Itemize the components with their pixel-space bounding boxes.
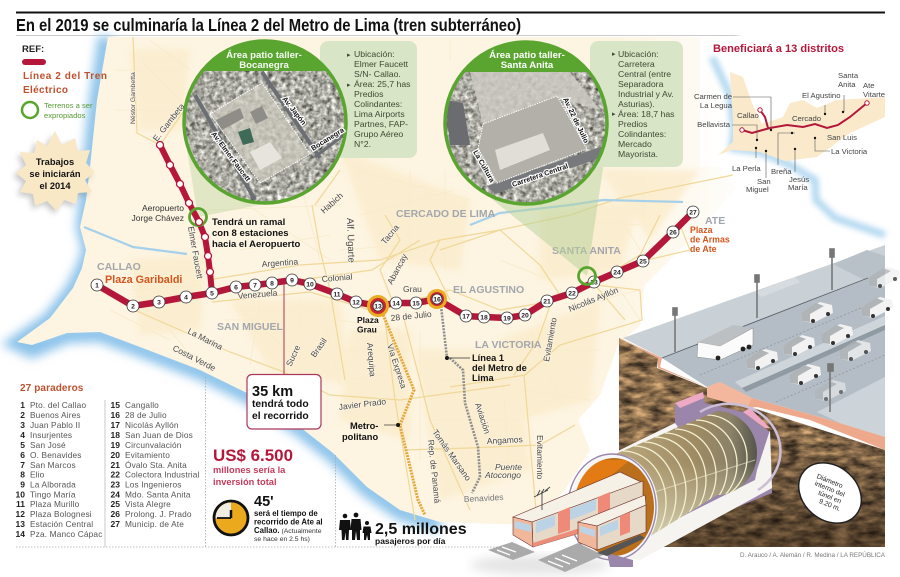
upper sidewalk — [623, 245, 885, 358]
list: 27 paraderos: Tingo María — [30, 490, 76, 500]
list: 27 paraderos: 16 — [111, 410, 120, 420]
linea 1 label — [445, 353, 527, 383]
stat: travel time: 45' — [254, 494, 274, 510]
line 1 metro — [441, 306, 480, 493]
callout: Aeropuerto Jorge Chávez: Aeropuerto — [142, 203, 184, 213]
land — [17, 37, 737, 525]
terrain rings — [190, 208, 206, 226]
inset coast — [712, 57, 885, 235]
callout: Aeropuerto Jorge Chávez: Jorge Chávez — [132, 213, 184, 223]
list: 27 paraderos: Estación Central — [30, 519, 93, 529]
list: 27 paraderos: 2 — [20, 410, 25, 420]
inset labels: San — [757, 177, 771, 186]
stat: investment — [213, 446, 293, 487]
linea 1 label: Línea 1 — [472, 353, 504, 363]
inset labels: Cercado — [792, 114, 821, 123]
callout: Plaza de Armas de Ate — [690, 225, 730, 254]
street labels: Evitamiento — [541, 317, 559, 362]
list: 27 paraderos: San Juan de Dios — [125, 430, 193, 440]
callout: Plaza Grau: Plaza — [357, 315, 379, 325]
list: 27 paraderos: Plaza Murillo — [30, 499, 80, 509]
legend: Terrenos a ser — [44, 101, 93, 110]
list: 27 paraderos: Pto. del Callao — [30, 400, 86, 410]
street labels: Elmer Faucett — [186, 226, 205, 280]
list: 27 paraderos — [16, 383, 199, 547]
street labels: ATE — [705, 215, 725, 227]
list: 27 paraderos: 9 — [20, 480, 25, 490]
list: 27 paraderos: 24 — [111, 490, 120, 500]
back rim — [700, 404, 780, 490]
street labels: Venezuela — [237, 288, 278, 301]
list: 27 paraderos: Los Ingenieros — [125, 480, 182, 490]
list: 27 paraderos: 27 paraderos — [20, 383, 84, 394]
satellite circle: Bocanegra: Av. Japón — [280, 95, 308, 127]
panel: Bocanegra info — [320, 41, 417, 158]
inset land — [718, 72, 885, 161]
minor streets — [110, 40, 640, 480]
inset map: 13 distritos — [694, 30, 898, 235]
inset labels: Vitarte — [863, 90, 885, 99]
list: 27 paraderos: Elio — [30, 470, 45, 480]
inset labels — [694, 71, 885, 194]
vehicles — [801, 302, 833, 323]
station numbers — [95, 210, 697, 322]
station numbers: 27 — [689, 210, 697, 216]
street labels: CERCADO DE LIMA — [396, 208, 496, 220]
list: 27 paraderos: 14 — [16, 529, 25, 539]
tunnel wall — [675, 392, 772, 520]
list: 27 paraderos: 1 — [20, 400, 25, 410]
panel: Bocanegra info: Partnes, FAP- — [354, 119, 408, 129]
station numbers: 9 — [290, 278, 294, 284]
starburst: Trabajos se iniciarán: se iniciarán — [29, 169, 81, 179]
street labels: EL AGUSTINO — [453, 284, 524, 296]
list: 27 paraderos: La Alborada — [30, 480, 76, 490]
street labels: Arequipa — [365, 342, 378, 377]
street labels: Atocongo — [484, 470, 521, 480]
list: 27 paraderos: 11 — [16, 499, 25, 509]
station numbers: 14 — [392, 300, 400, 308]
list: 27 paraderos: 15 — [111, 400, 120, 410]
diameter callout: Diámetro — [815, 473, 844, 490]
station numbers: 2 — [131, 304, 135, 310]
list: 27 paraderos: Vista Alegre — [125, 499, 171, 509]
street labels: Rep. de Panamá — [426, 439, 443, 504]
satellite circle: Santa Anita: Santa Anita — [501, 60, 554, 71]
legend — [22, 44, 107, 120]
credits: D. Arauco / A. Alemán / R. Medina / LA REPÚBLICA — [740, 550, 886, 559]
street labels: Argentina — [261, 256, 299, 269]
station numbers: 20 — [521, 312, 529, 320]
urban patches — [130, 50, 700, 500]
list: 27 paraderos: 25 — [111, 499, 120, 509]
callout: 35 km: 35 km — [252, 384, 293, 400]
inset labels: Ate — [863, 81, 875, 90]
list: 27 paraderos: 20 — [111, 450, 120, 460]
numbered stations — [91, 206, 699, 324]
list: 27 paraderos: 10 — [16, 490, 25, 500]
street labels: Alf. Ugarte — [344, 218, 357, 263]
street labels: Aviación — [473, 402, 493, 435]
panel: Bocanegra info: Colindantes: — [354, 99, 402, 109]
list: 27 paraderos: 8 — [20, 470, 25, 480]
list: 27 paraderos: Buenos Aires — [30, 410, 81, 420]
linea 1 label: Lima — [472, 373, 495, 383]
panel: Bocanegra info: Elmer Faucett — [354, 59, 409, 69]
satellite circle: Santa Anita: Av. 22 de Julio — [561, 96, 591, 145]
inset labels: Breña — [771, 167, 792, 176]
street labels: Habich — [319, 190, 345, 215]
station numbers: 24 — [613, 270, 621, 276]
main map — [17, 37, 737, 525]
station numbers: 26 — [669, 230, 677, 236]
street labels: LA VICTORIA — [475, 339, 542, 351]
bottom dividers — [16, 377, 500, 547]
metropolitano label: Metro- — [350, 421, 378, 431]
inset labels: Miguel — [746, 185, 769, 194]
callout: 35 km: tendrá todo — [252, 399, 309, 410]
street labels: Tacna — [379, 222, 401, 246]
satellite circle: Santa Anita — [444, 40, 608, 204]
list: 27 paraderos: 4 — [20, 430, 25, 440]
panel: Santa Anita info: Carretera — [618, 59, 655, 69]
list: 27 paraderos: Insurjentes — [30, 430, 72, 440]
street labels: Puente — [495, 462, 522, 472]
list: 27 paraderos: Pza. Manco Cápac — [30, 529, 102, 539]
panel: Santa Anita info: Mercado — [618, 139, 652, 149]
station numbers: 12 — [352, 300, 360, 306]
satellite circle: Santa Anita: Carretera Central — [511, 161, 569, 189]
panel: Santa Anita info: ▸ — [612, 51, 616, 58]
station numbers: 11 — [333, 292, 341, 298]
list: 27 paraderos: 28 de Julio — [125, 410, 167, 420]
street labels: Nicolás Ayllón — [567, 285, 620, 314]
branch stations — [156, 142, 214, 276]
road lanes — [662, 272, 885, 437]
street labels: Benavides — [464, 492, 504, 504]
stat: passengers: pasajeros por día — [375, 536, 446, 546]
rails — [488, 535, 645, 572]
inset labels: Jesús — [789, 175, 809, 184]
list: 27 paraderos: Evitamiento — [125, 450, 170, 460]
station numbers: 19 — [503, 316, 511, 322]
list: 27 paraderos: 6 — [20, 450, 25, 460]
station numbers: 22 — [568, 290, 576, 298]
list: 27 paraderos: Colectora Industrial — [125, 470, 199, 480]
list: 27 paraderos: Prolong. J. Prado — [125, 509, 192, 519]
Line 2 route — [91, 142, 699, 324]
inset labels: La Victoria — [831, 147, 868, 156]
callout: Plaza Garibaldi: Plaza Garibaldi — [105, 274, 182, 286]
diameter callout: 9.20 m. — [818, 498, 841, 513]
list: 27 paraderos: Óvalo Sta. Anita — [125, 460, 187, 470]
panel: Santa Anita info: Predios — [618, 119, 648, 129]
inset labels: La Perla — [732, 164, 761, 173]
street labels: E. Gambeta — [151, 101, 187, 143]
median — [735, 316, 885, 388]
metropolitano label: politano — [342, 432, 378, 442]
panel: Santa Anita info: Área: 18,7 has — [618, 109, 675, 119]
front ring — [573, 457, 655, 557]
inset labels: El Agustino — [802, 91, 840, 100]
icon: passengers — [339, 513, 372, 540]
list: 27 paraderos: Plaza Bolognesi — [30, 509, 92, 519]
inset labels: Anita — [838, 80, 856, 89]
station numbers: 5 — [210, 290, 214, 298]
station numbers: 18 — [480, 314, 488, 322]
list: 27 paraderos: 19 — [111, 440, 120, 450]
green cone: Santa Anita — [487, 135, 608, 276]
satellite circle: Bocanegra: Av. Elmer Faucett — [209, 130, 253, 184]
legend: expropiados — [44, 111, 86, 120]
station numbers: 6 — [234, 284, 238, 292]
satellite circle: Santa Anita: Área patio taller- — [489, 49, 565, 61]
station numbers: 10 — [306, 282, 314, 288]
street labels: Sucre — [284, 343, 302, 368]
street labels: Evitamiento — [535, 435, 545, 480]
inset labels: Callao — [737, 111, 759, 120]
stat: travel time: Callao. (Actualmente — [254, 526, 322, 535]
train 1 — [513, 472, 643, 547]
list: 27 paraderos: 17 — [111, 420, 120, 430]
callout: 35 km: el recorrido — [252, 411, 309, 422]
legend: Línea 2 del Tren — [23, 71, 107, 82]
shadow under trains — [470, 555, 610, 575]
list: 27 paraderos: San Marcos — [30, 460, 76, 470]
list: 27 paraderos: San José — [30, 440, 66, 450]
header rule and title: En el 2019 se culminaría la Línea 2 del Metro de Lima (tren subterráneo) — [16, 15, 521, 35]
coastline glow — [17, 37, 440, 525]
station numbers: 13 — [374, 304, 382, 310]
satellite circle: Bocanegra: Área patio taller- — [226, 49, 302, 61]
panel: Santa Anita info: Mayorista. — [618, 149, 658, 159]
station numbers: 23 — [590, 280, 598, 286]
stat: travel time: recorrido de Ate al — [254, 518, 323, 526]
panel: Bocanegra info: S/N- Callao. — [354, 69, 401, 79]
legend: REF: — [22, 44, 44, 55]
station numbers: 25 — [639, 258, 647, 266]
stat: travel time: se hace en 2.5 hs) — [254, 536, 310, 543]
list: 27 paraderos: 5 — [20, 440, 25, 450]
soil — [619, 338, 885, 547]
metropolitano line — [382, 312, 425, 515]
list: 27 paraderos: 12 — [16, 509, 25, 519]
panel: Bocanegra info: Grupo Aéreo — [354, 129, 403, 139]
list: 27 paraderos: Municip. de Ate — [125, 519, 184, 529]
stat: investment: millones sería la — [213, 465, 286, 475]
panel: Bocanegra info: N°2. — [354, 139, 371, 149]
callout: ramal al aeropuerto — [212, 217, 301, 250]
diameter callout — [787, 450, 873, 536]
callout: Plaza de Armas de Ate: Plaza — [690, 225, 713, 235]
list: 27 paraderos: Cangallo — [125, 400, 159, 410]
station numbers: 21 — [543, 298, 551, 306]
list: 27 paraderos: 27 — [111, 519, 120, 529]
stat: investment: inversión total — [213, 477, 277, 487]
connector: 35 km leader — [283, 283, 285, 375]
lower sidewalk — [817, 377, 885, 437]
station numbers: 4 — [184, 294, 188, 302]
list: 27 paraderos: Juan Pablo II — [30, 420, 80, 430]
stat: passengers — [375, 521, 467, 546]
street lamps — [673, 249, 834, 412]
station numbers: 8 — [270, 280, 274, 288]
green cone: Bocanegra — [187, 150, 285, 217]
panel: Bocanegra info: Ubicación: — [354, 49, 395, 59]
panel: Santa Anita info: Industrial y Av. — [618, 89, 674, 99]
panel: Bocanegra info: ▸ — [347, 82, 351, 89]
callout: Plaza Grau: Grau — [357, 324, 377, 334]
list: 27 paraderos: Nicolás Ayllón — [125, 420, 179, 430]
street labels: Javier Prado — [338, 396, 387, 412]
street labels: SAN MIGUEL — [217, 321, 284, 333]
list: 27 paraderos: Mdo. Santa Anita — [125, 490, 191, 500]
tunnel tube with ribs — [616, 402, 782, 536]
street labels: CALLAO — [97, 261, 141, 273]
street labels: Costa Verde — [171, 343, 218, 373]
callout: ramal al aeropuerto: Tendrá un ramal — [212, 217, 285, 228]
diameter callout: interno del — [814, 480, 846, 499]
callout: Plaza Grau — [357, 315, 379, 334]
starburst: Trabajos se iniciarán — [13, 131, 95, 214]
inset labels: Santa — [838, 71, 859, 80]
panel: Santa Anita info: Central (entre — [618, 69, 671, 79]
inset labels: Carmen de — [694, 92, 732, 101]
panel: Santa Anita info: ▸ — [612, 111, 616, 118]
satellite circle: Bocanegra — [183, 40, 350, 204]
panel: Santa Anita info: Ubicación: — [618, 49, 659, 59]
panel: Bocanegra info: ▸ — [347, 52, 351, 59]
river — [84, 200, 683, 254]
station numbers: 15 — [412, 300, 420, 308]
stat: travel time: será el tiempo de — [254, 509, 318, 518]
station numbers: 16 — [433, 296, 441, 304]
lane dashes — [700, 298, 885, 375]
tunnel cross-section illustration — [470, 245, 900, 575]
station numbers: 1 — [95, 282, 99, 290]
inset map: 13 distritos: Beneficiará a 13 distritos — [713, 43, 844, 55]
starburst: Trabajos se iniciarán: el 2014 — [39, 181, 71, 191]
street labels: Abancay — [385, 251, 410, 286]
callout: Aeropuerto Jorge Chávez — [132, 203, 184, 223]
station numbers: 17 — [462, 314, 470, 320]
train 2 — [578, 495, 646, 550]
inset labels: La Legua — [700, 101, 733, 110]
station numbers: 7 — [253, 282, 257, 290]
tunnel outer channel — [612, 430, 772, 560]
street labels: SANTA ANITA — [552, 245, 621, 257]
street labels: Tomás Marsano — [430, 427, 473, 483]
legend: Eléctrico — [23, 85, 68, 96]
metropolitano label — [342, 421, 400, 442]
main roads — [130, 37, 733, 520]
list: 27 paraderos: 7 — [20, 460, 25, 470]
inset labels: María — [788, 183, 808, 192]
panel: Bocanegra info: Área: 25,7 has — [354, 79, 411, 89]
panel: Santa Anita info: Colindantes: — [618, 129, 666, 139]
satellite circle: Bocanegra: Bocanegra — [309, 125, 346, 153]
inset labels: San Luis — [827, 133, 857, 142]
diameter callout: túnel en — [817, 490, 842, 505]
list: 27 paraderos: 23 — [111, 480, 120, 490]
interchange stations — [367, 289, 447, 317]
callout: ramal al aeropuerto: hacia el Aeropuerto — [212, 239, 301, 250]
concrete edge — [620, 338, 885, 450]
callout: ramal al aeropuerto: con 8 estaciones — [212, 228, 289, 239]
list: 27 paraderos: Circunvalación — [125, 440, 182, 450]
street labels: Grau — [403, 284, 422, 294]
street labels: Vía Expresa — [385, 343, 409, 390]
street labels: Brasil — [308, 336, 329, 359]
list: 27 paraderos: 21 — [111, 460, 120, 470]
list: 27 paraderos: O. Benavides — [30, 450, 82, 460]
list: 27 paraderos: 3 — [20, 420, 25, 430]
list: 27 paraderos: 13 — [16, 519, 25, 529]
station numbers: 3 — [157, 300, 161, 306]
stat: travel time — [254, 494, 323, 543]
panel: Santa Anita info: Asturias). — [618, 99, 655, 109]
bus — [697, 325, 753, 360]
street labels: Angamos — [487, 434, 523, 446]
street labels: La Marina — [186, 326, 225, 352]
street labels: Colonial — [321, 271, 353, 284]
list: 27 paraderos: 26 — [111, 509, 120, 519]
linea 1 label: del Metro de — [472, 363, 527, 373]
inset labels: Bellavista — [697, 120, 731, 129]
satellite circle: Bocanegra: Bocanegra — [239, 60, 289, 71]
panel: Santa Anita info — [590, 41, 683, 167]
icon: clock — [214, 501, 248, 535]
starburst: Trabajos se iniciarán: Trabajos — [36, 157, 74, 167]
stat: passengers: 2,5 millones — [375, 521, 467, 538]
callout: Plaza de Armas de Ate: de Ate — [690, 244, 717, 254]
callout: Plaza de Armas de Ate: de Armas — [690, 234, 730, 244]
street labels — [97, 72, 725, 504]
list: 27 paraderos: 22 — [111, 470, 120, 480]
panel: Bocanegra info: Predios — [354, 89, 384, 99]
street labels: Néstor Gambetta — [130, 72, 137, 124]
satellite circle: Santa Anita: La Cultura — [471, 148, 497, 185]
inset route — [742, 103, 867, 133]
stat: investment: US$ 6.500 — [213, 446, 293, 465]
callout: 35 km — [247, 374, 321, 429]
inset leader lines — [732, 95, 844, 178]
panel: Bocanegra info: Lima Airports — [354, 109, 405, 119]
street labels: 28 de Julio — [390, 309, 432, 323]
list: 27 paraderos: 18 — [111, 430, 120, 440]
panel: Santa Anita info: Separadora — [618, 79, 664, 89]
